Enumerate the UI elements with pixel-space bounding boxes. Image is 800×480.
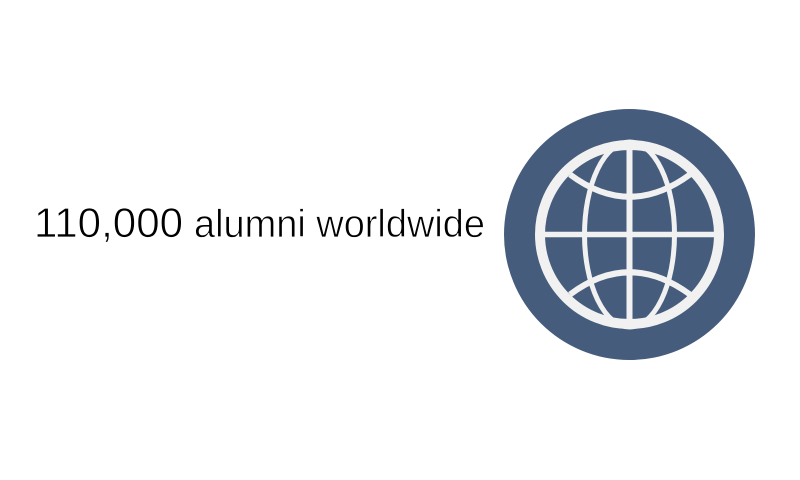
statistic text: alumni worldwide [194,203,485,246]
statistic text: 110,000 [34,199,183,246]
icon: globe [504,109,755,360]
statistic text [34,199,485,246]
